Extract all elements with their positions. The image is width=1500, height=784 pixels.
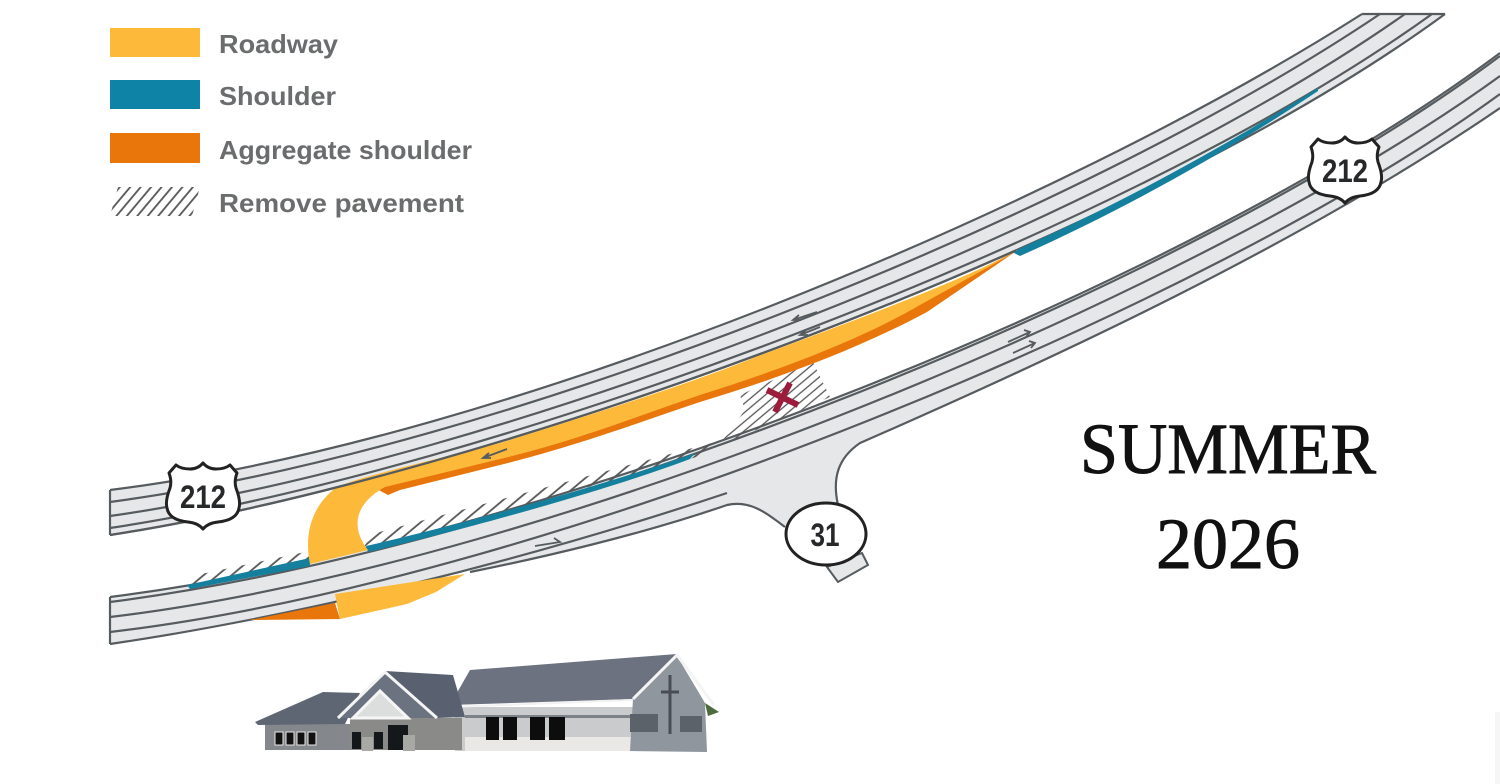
entry fascia [338, 672, 437, 718]
title: Summer 2026: 2026 [1156, 504, 1300, 584]
main hall wall [455, 707, 635, 751]
entry inner gable [353, 691, 408, 718]
legend item: roadway: Roadway [219, 29, 339, 59]
aggregate shoulder south of lower road [250, 603, 340, 620]
title: Summer 2026: SUMMER [1080, 409, 1376, 489]
legend item: remove pavement: Remove pavement [219, 188, 464, 218]
legend item: shoulder: Shoulder [219, 81, 336, 111]
new shoulder: upper road (teal) [1012, 88, 1318, 256]
road stub below route 31 sign [827, 553, 868, 582]
sign: US 212 west [166, 463, 240, 529]
direction arrow: crossover [483, 449, 507, 458]
sign: route 31: 31 [810, 517, 840, 553]
legend item: aggregate shoulder [110, 133, 472, 165]
building: church [255, 654, 719, 752]
title: Summer 2026 [1080, 409, 1376, 584]
road: lower eastbound lanes of US 212 with Highway 31 junction [110, 53, 1500, 644]
end gable dark bands [630, 714, 702, 732]
red X: closed connection [767, 383, 798, 412]
sign: US 212 west: 212 [180, 479, 226, 515]
road: upper westbound lanes of US 212 [110, 14, 1445, 535]
end gable fascia [633, 655, 714, 705]
main hall roof [450, 654, 677, 705]
end gable cross [661, 675, 679, 734]
left wing windows [275, 732, 316, 745]
sign: US 212 east: 212 [1322, 153, 1368, 189]
main hall windows [486, 717, 565, 740]
direction arrows: upper road [793, 312, 820, 335]
entry roof [385, 671, 465, 718]
new roadway: south widening (yellow) [335, 574, 465, 619]
entry doors [352, 725, 408, 750]
new shoulder: lower road (teal) [187, 453, 695, 589]
main eave trim [450, 700, 633, 707]
legend item: remove pavement [110, 187, 464, 218]
end gable wall [630, 656, 707, 752]
legend item: roadway [110, 28, 339, 59]
left wing roof [255, 692, 360, 725]
sign: route 31 [786, 503, 866, 565]
upper road inner edge over crossover [110, 249, 1016, 536]
new roadway: crossover (yellow) [308, 250, 1018, 564]
left wing wall [265, 724, 355, 750]
entry pillars [362, 735, 415, 751]
legend item: aggregate shoulder: Aggregate shoulder [219, 135, 472, 165]
sign: US 212 east [1308, 137, 1382, 203]
main hall trim band [465, 715, 631, 718]
entry wall [350, 718, 462, 750]
legend [110, 28, 472, 218]
entry gable fill [338, 673, 437, 718]
edge artifact bottom right [1495, 712, 1500, 784]
main hall stone base [465, 737, 631, 751]
hatching: remove pavement area [187, 362, 830, 585]
tree behind gable [705, 703, 719, 716]
legend item: shoulder [110, 80, 336, 111]
aggregate shoulder along new roadway [375, 250, 1018, 495]
direction arrows: lower road [535, 330, 1035, 546]
